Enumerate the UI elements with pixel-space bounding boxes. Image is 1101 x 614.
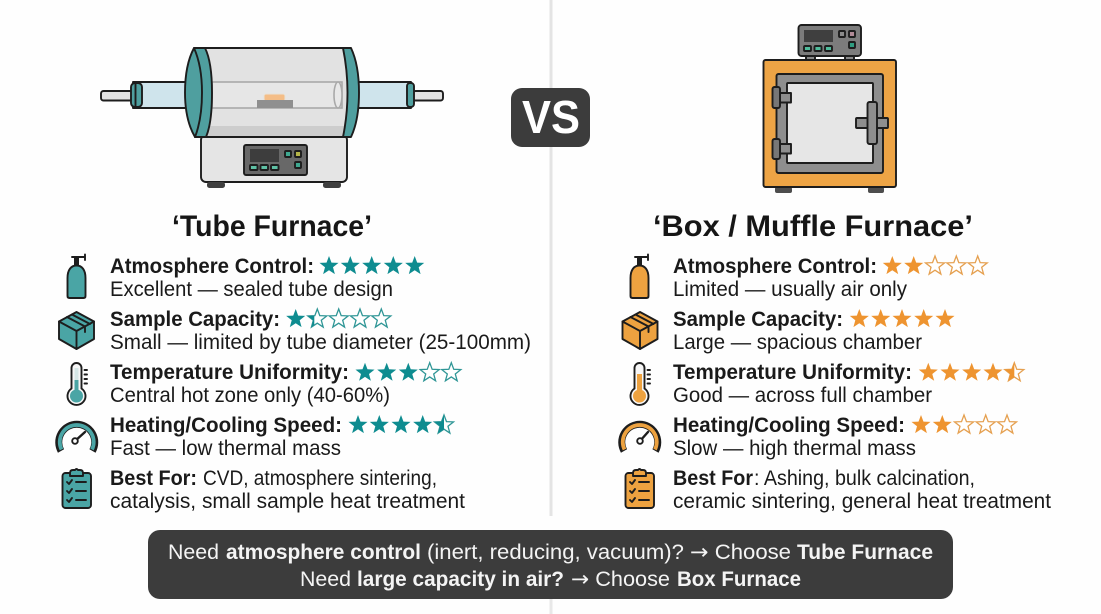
panel: tube furnace: [59, 48, 531, 513]
VS badge: VS: [522, 91, 580, 143]
icon: gauge: [622, 424, 658, 451]
heading: box muffle furnace: ‘Box / Muffle Furnace’: [653, 210, 973, 243]
row: heating and cooling speed: [59, 414, 454, 460]
icon: box: [622, 312, 658, 349]
row: best for: CVD, atmosphere sintering,: [203, 467, 437, 490]
icon: gas cylinder: [68, 254, 86, 298]
illustration: box muffle furnace: [764, 25, 896, 193]
callout: decision summary: [148, 530, 953, 599]
row: sample capacity: [59, 308, 531, 354]
row: heating and cooling speed: Heating/Cooling Speed:: [110, 414, 342, 437]
rating: 1.25 of 5 stars: [286, 309, 391, 327]
icon: gauge: [59, 424, 95, 451]
row: atmosphere control: Atmosphere Control:: [673, 255, 877, 278]
icon: gas cylinder: [630, 254, 648, 298]
row: temperature uniformity: [630, 361, 1024, 407]
rating: 2 of 5 stars: [911, 415, 1017, 433]
right end cap: [343, 48, 359, 137]
row: best for: catalysis, small sample heat treatment: [110, 490, 465, 513]
row: best for: Best For:: [110, 467, 197, 490]
row: heating and cooling speed: [622, 414, 1017, 460]
row: sample capacity: Sample Capacity:: [673, 308, 843, 331]
callout: decision summary: Box Furnace: [677, 568, 801, 591]
row: sample capacity: Sample Capacity:: [110, 308, 280, 331]
row: temperature uniformity: [67, 361, 461, 407]
callout: decision summary: Tube Furnace: [797, 541, 933, 564]
panel: box furnace: [622, 25, 1051, 513]
row: atmosphere control: Atmosphere Control:: [110, 255, 314, 278]
row: atmosphere control: Excellent — sealed tube design: [110, 278, 393, 301]
callout: decision summary: atmosphere control: [226, 541, 421, 564]
row: sample capacity: Small — limited by tube diameter (25-100mm): [110, 331, 531, 354]
row: best for: : Ashing, bulk calcination,: [754, 467, 975, 490]
callout: decision summary: large capacity in air?: [357, 568, 564, 591]
row: temperature uniformity: Temperature Uniformity:: [673, 361, 912, 384]
callout: decision summary: Need: [168, 541, 219, 564]
illustration: tube furnace: [101, 48, 443, 188]
row: heating and cooling speed: Slow — high thermal mass: [673, 437, 916, 460]
icon: clipboard: [626, 469, 654, 508]
row: atmosphere control: [68, 254, 424, 301]
callout: decision summary: → Choose: [571, 567, 670, 591]
VS badge: [511, 88, 590, 147]
rating: 4.5 of 5 stars: [348, 415, 454, 433]
left end cap: [185, 48, 212, 137]
row: atmosphere control: [630, 254, 987, 301]
row: best for: [62, 467, 465, 513]
rating: 5 of 5 stars: [850, 309, 955, 327]
icon: clipboard: [62, 469, 91, 508]
row: best for: [626, 467, 1051, 513]
row: temperature uniformity: Good — across full chamber: [673, 384, 932, 407]
rating: 5 of 5 stars: [319, 256, 424, 274]
row: heating and cooling speed: Heating/Cooling Speed:: [673, 414, 905, 437]
heading: tube furnace: ‘Tube Furnace’: [172, 210, 372, 243]
row: heating and cooling speed: Fast — low thermal mass: [110, 437, 341, 460]
row: temperature uniformity: Central hot zone only (40-60%): [110, 384, 390, 407]
icon: box: [59, 312, 94, 349]
row: best for: ceramic sintering, general heat treatment: [673, 490, 1051, 513]
row: temperature uniformity: Temperature Uniformity:: [110, 361, 349, 384]
rating: 3 of 5 stars: [355, 363, 461, 381]
rating: 4.5 of 5 stars: [919, 363, 1024, 381]
row: atmosphere control: Limited — usually air only: [673, 278, 907, 301]
icon: thermometer: [630, 363, 650, 405]
rating: 2 of 5 stars: [883, 256, 987, 274]
row: best for: Best For: [673, 467, 753, 490]
row: sample capacity: [622, 308, 955, 354]
icon: thermometer: [67, 363, 87, 405]
row: sample capacity: Large — spacious chamber: [673, 331, 922, 354]
callout: decision summary: Need: [300, 568, 351, 591]
callout: decision summary: (inert, reducing, vacuum)? → Choose: [427, 540, 791, 564]
